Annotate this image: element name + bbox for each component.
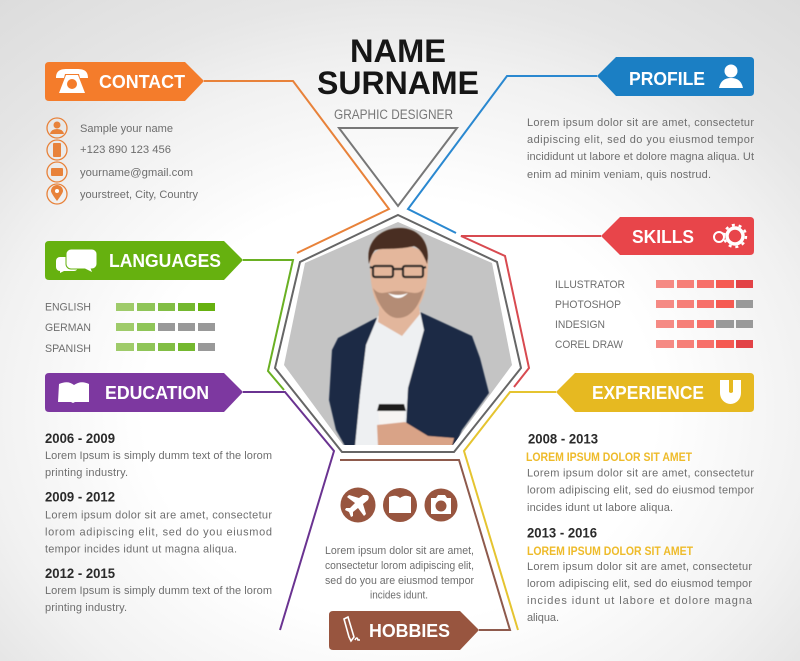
education entry: 2006-2009: printing industry. (45, 467, 128, 479)
education entry: 2006-2009: Lorem Ipsum is simply dumm text of the lorom (45, 450, 272, 462)
portrait photo (284, 222, 512, 445)
heading tag: hobbies (329, 611, 479, 650)
heading text: experience: EXPERIENCE (592, 382, 704, 403)
connector: profile (408, 76, 597, 233)
hobbies text: consectetur lorom adipiscing elit, (325, 560, 474, 572)
education entry: 2012-2015: 2012 - 2015 (45, 566, 115, 581)
icon: mouse (720, 380, 741, 404)
icon: book (383, 488, 417, 522)
icon: gears (714, 225, 746, 247)
skill rating: illustrator (555, 279, 753, 291)
contact row: email: yourname@gmail.com (80, 167, 193, 179)
experience entry: 2008-2013: lorom adipiscing elit, sed do eiusmod tempor (527, 484, 754, 496)
contact row: phone: +123 890 123 456 (80, 144, 171, 156)
experience entry: 2013-2016: aliqua. (527, 612, 559, 624)
education entry: 2009-2012: Lorem ipsum dolor sit are amet, consectetur (45, 510, 272, 522)
experience entry: 2008-2013 (526, 432, 754, 514)
contact row: address: yourstreet, City, Country (80, 189, 198, 201)
heading tag: skills (601, 217, 754, 255)
icon: speech bubbles (56, 249, 97, 273)
heading text: languages: LANGUAGES (109, 250, 221, 271)
icon: open book (58, 382, 89, 403)
experience entry: 2008-2013: incides idunt ut labore aliqua. (527, 502, 673, 514)
contact row: address (47, 184, 198, 204)
education entry: 2009-2012 (45, 490, 272, 556)
heading tag: languages (45, 241, 243, 280)
experience entry: 2008-2013: LOREM IPSUM DOLOR SIT AMET (526, 452, 692, 464)
education entry: 2006-2009 (45, 431, 272, 479)
connector: hobbies (340, 460, 510, 630)
heading text: profile: PROFILE (629, 68, 705, 89)
education entry: 2012-2015: Lorem Ipsum is simply dumm text of the lorom (45, 585, 272, 597)
hobbies text (325, 545, 474, 602)
jacket (329, 312, 489, 446)
education entry: 2009-2012: tempor incides idunt ut magna aliqua. (45, 544, 237, 556)
profile text: incididunt ut labore et dolore magna aliqua. Ut (527, 151, 754, 163)
panel: languages (45, 241, 243, 355)
title: NAME (350, 33, 446, 69)
connector: contact (204, 81, 389, 253)
neck (378, 306, 420, 336)
triangle outline (339, 128, 457, 206)
language rating: german (45, 322, 215, 334)
hobbies text: sed do you are eiusmod tempor (325, 575, 474, 587)
experience entry: 2013-2016: incides idunt ut labore et dolore magna (527, 595, 753, 607)
heading tag: contact (45, 62, 204, 101)
contact row: phone (47, 140, 171, 160)
skill rating: illustrator: ILLUSTRATOR (555, 279, 625, 291)
education entry: 2012-2015 (45, 566, 272, 614)
panel: experience (526, 373, 754, 624)
language rating: spanish (45, 343, 215, 355)
panel: profile (527, 57, 754, 181)
connector: languages (243, 260, 293, 390)
education entry: 2009-2012: lorom adipiscing elit, sed do you eiusmod (45, 526, 272, 538)
profile text (527, 117, 754, 181)
heading text: hobbies: HOBBIES (369, 620, 450, 641)
title (317, 33, 479, 101)
shirt (355, 311, 424, 446)
education entry: 2006-2009: 2006 - 2009 (45, 431, 115, 446)
contact row: name: Sample your name (80, 123, 173, 135)
icon: person (719, 64, 743, 88)
heading text: contact: CONTACT (99, 71, 186, 92)
beard (373, 288, 424, 318)
profile text: adipiscing elit, sed do you eiusmod tempor (527, 134, 754, 146)
portrait frame (275, 215, 521, 452)
language rating: german: GERMAN (45, 322, 91, 334)
panel: contact (45, 62, 204, 204)
experience entry: 2013-2016: Lorem ipsum dolor sit are amet, consectetur (527, 561, 752, 573)
skill rating: corel draw: COREL DRAW (555, 339, 624, 351)
heading tag: education (45, 373, 243, 412)
contact row: name (47, 118, 173, 138)
experience entry: 2013-2016: lorom adipiscing elit, sed do eiusmod tempor (527, 578, 752, 590)
heading text: education: EDUCATION (105, 382, 209, 403)
hobbies text: Lorem ipsum dolor sit are amet, (325, 545, 474, 557)
glasses (370, 266, 426, 277)
hand (377, 422, 454, 446)
experience entry: 2013-2016 (527, 526, 753, 624)
heading text: skills: SKILLS (632, 226, 694, 247)
experience entry: 2008-2013: Lorem ipsum dolor sit are amet, consectetur (527, 468, 754, 480)
subtitle: job role: GRAPHIC DESIGNER (334, 107, 453, 122)
experience entry: 2013-2016: LOREM IPSUM DOLOR SIT AMET (527, 546, 693, 558)
education entry: 2009-2012: 2009 - 2012 (45, 490, 115, 504)
connector: education (243, 392, 334, 630)
experience entry: 2008-2013: 2008 - 2013 (528, 432, 598, 446)
skill rating: indesign: INDESIGN (555, 319, 605, 331)
hobbies text: incides idunt. (370, 590, 428, 602)
panel: hobbies (325, 488, 479, 650)
language rating: spanish: SPANISH (45, 343, 91, 355)
profile text: Lorem ipsum dolor sit are amet, consectetur (527, 117, 754, 129)
education entry: 2012-2015: printing industry. (45, 602, 127, 614)
profile text: enim ad minim veniam, quis nostrud. (527, 169, 711, 181)
cup (379, 412, 404, 424)
contact row: email (47, 162, 193, 182)
icon: camera (424, 488, 458, 522)
connector: experience (464, 392, 556, 630)
smile (388, 293, 408, 298)
face (369, 246, 428, 308)
panel: skills (555, 217, 754, 351)
skill rating: photoshop: PHOTOSHOP (555, 299, 621, 311)
heading tag: experience (556, 373, 754, 412)
heading tag: profile (597, 57, 754, 96)
icon: airplane (340, 488, 376, 522)
panel: education (45, 373, 272, 614)
icon: pencil (344, 617, 360, 641)
skill rating: corel draw (555, 339, 753, 351)
icon: telephone (56, 69, 88, 93)
connector: skills (461, 236, 601, 387)
hair (368, 228, 428, 264)
skill rating: photoshop (555, 299, 753, 311)
language rating: english (45, 302, 215, 314)
title: SURNAME (317, 65, 479, 101)
skill rating: indesign (555, 319, 753, 331)
experience entry: 2013-2016: 2013 - 2016 (527, 526, 597, 540)
language rating: english: ENGLISH (45, 302, 91, 314)
